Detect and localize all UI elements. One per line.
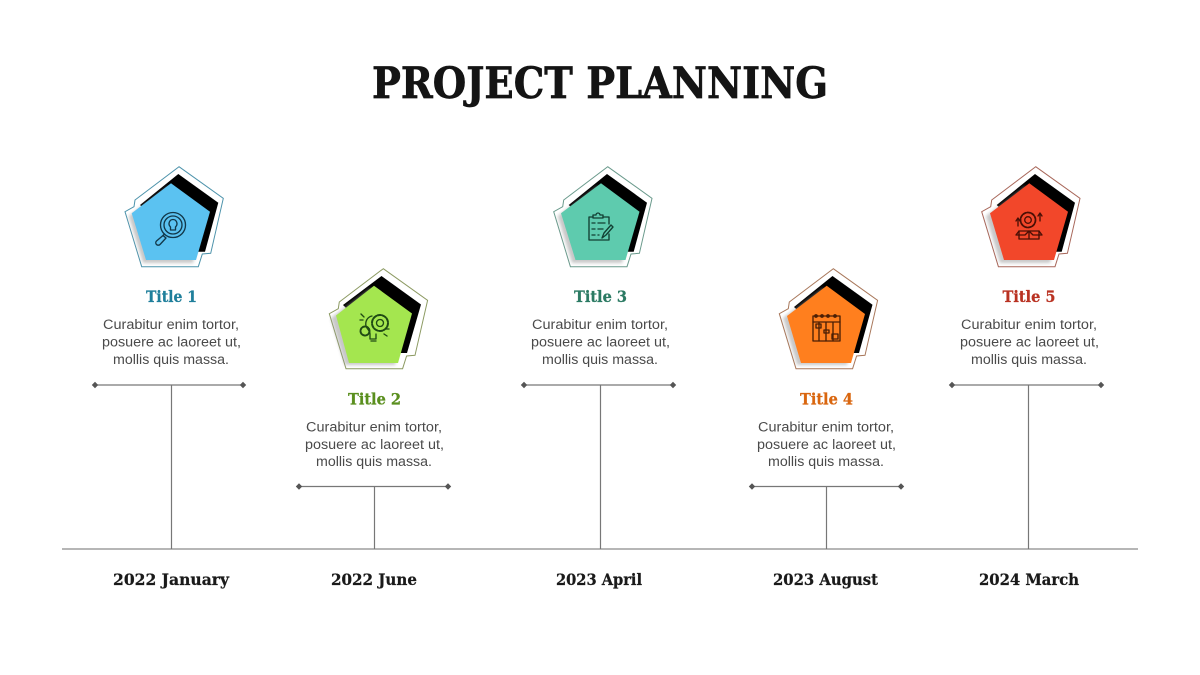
- text block: Curabitur enim tortor,: [103, 317, 239, 332]
- text block: posuere ac laoreet ut,: [531, 334, 670, 350]
- icon: magnifier with bulb: [156, 212, 186, 245]
- icon: pentagon badge green: [329, 269, 428, 369]
- text block: mollis quis massa.: [768, 454, 884, 469]
- heading: Title 4: Title 4: [800, 390, 853, 408]
- text block: Curabitur enim tortor,: [758, 420, 894, 434]
- text block: mollis quis massa.: [113, 352, 229, 367]
- heading: Title 1: Title 1: [146, 287, 197, 306]
- milestone 1: 2022 January: [92, 167, 246, 589]
- text block: Curabitur enim tortor,: [532, 317, 668, 332]
- connector: [92, 382, 246, 549]
- icon: clipboard checklist: [589, 213, 613, 240]
- connector: [296, 483, 451, 549]
- text block: posuere ac laoreet ut,: [960, 334, 1099, 350]
- milestone 3: 2023 April: [521, 167, 676, 589]
- date label: 2022 January: [113, 570, 230, 589]
- text block: [960, 317, 1099, 367]
- date label: 2022 June: [331, 570, 417, 589]
- milestone 2: 2022 June: [296, 269, 451, 589]
- date label: 2023 August: [773, 570, 879, 589]
- text block: [757, 420, 896, 469]
- text block: Curabitur enim tortor,: [306, 420, 442, 434]
- icon: box with gear: [1016, 212, 1042, 239]
- text block: [531, 317, 670, 367]
- icon: gantt calendar: [813, 315, 840, 341]
- date label: 2024 March: [979, 570, 1079, 589]
- connector: [949, 382, 1104, 549]
- text block: posuere ac laoreet ut,: [102, 334, 241, 350]
- icon: pentagon badge blue: [125, 167, 223, 267]
- icon: gears and bulb: [360, 314, 389, 341]
- icon: pentagon badge orange: [779, 269, 878, 369]
- icon: pentagon badge teal: [554, 167, 652, 267]
- milestone 5: 2024 March: [949, 167, 1104, 589]
- text block: mollis quis massa.: [316, 454, 432, 469]
- text block: [102, 317, 241, 367]
- heading: Title 2: Title 2: [348, 390, 401, 408]
- text block: posuere ac laoreet ut,: [305, 437, 444, 452]
- text block: mollis quis massa.: [971, 352, 1087, 367]
- text block: [305, 420, 444, 469]
- connector: [749, 483, 904, 549]
- text block: Curabitur enim tortor,: [961, 317, 1097, 332]
- date label: 2023 April: [556, 570, 642, 589]
- heading: Title 5: Title 5: [1002, 287, 1056, 306]
- icon: pentagon badge red: [982, 167, 1080, 267]
- text block: posuere ac laoreet ut,: [757, 437, 896, 452]
- text block: mollis quis massa.: [542, 352, 658, 367]
- milestone 4: 2023 August: [749, 269, 904, 589]
- heading: Title 3: Title 3: [574, 287, 627, 306]
- connector: [521, 382, 676, 549]
- title: PROJECT PLANNING: [372, 59, 828, 109]
- timeline axis: [62, 548, 1138, 550]
